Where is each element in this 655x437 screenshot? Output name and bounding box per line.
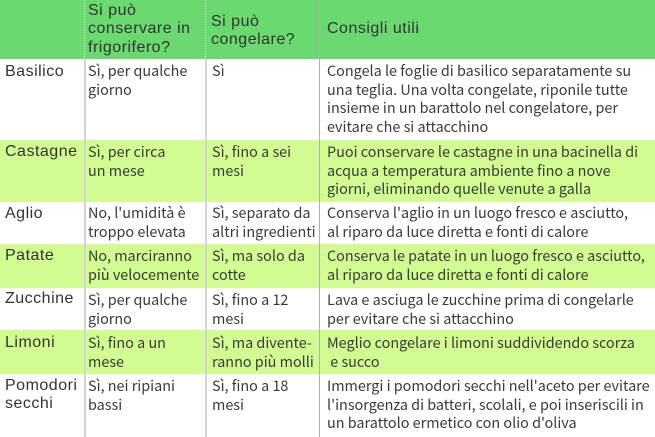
cell: Castagne consigli: Puoi conservare le castagne in una bacinella di acqua a temperatura ambiente fino a nove giorni, eliminando quelle venute a galla <box>327 141 638 199</box>
cell: Basilico congelare: Sì <box>212 60 225 81</box>
row label: Limoni: Limoni <box>5 334 55 351</box>
cell: Zucchine frigorifero: Sì, per qualche giorno <box>88 289 187 329</box>
cell: Limoni frigorifero: Sì, fino a un mese <box>88 332 166 372</box>
row label: Patate: Patate <box>5 247 54 264</box>
header: Si può conservare in frigorifero?: Si può conservare in frigorifero? <box>88 2 191 56</box>
row label: Aglio: Aglio <box>5 205 43 222</box>
header: Consigli utili: Consigli utili <box>327 20 419 37</box>
cell: Limoni consigli: Meglio congelare i limoni suddividendo scorza e succo <box>327 332 635 372</box>
cell: Patate frigorifero: No, marciranno più velocemente <box>88 245 199 285</box>
cell: Zucchine consigli: Lava e asciuga le zucchine prima di congelarle per evitare che si attacchino <box>327 289 634 329</box>
cell: Aglio frigorifero: No, l'umidità è troppo elevata <box>88 202 186 242</box>
row label: Castagne: Castagne <box>5 143 78 160</box>
table header band <box>0 0 655 59</box>
cell: Limoni congelare: Sì, ma divente- ranno più molli <box>212 332 314 372</box>
cell: Patate congelare: Sì, ma solo da cotte <box>212 245 305 285</box>
cell: Castagne frigorifero: Sì, per circa un mese <box>88 141 165 181</box>
cell: Zucchine congelare: Sì, fino a 12 mesi <box>212 289 288 329</box>
cell: Aglio consigli: Conserva l'aglio in un luogo fresco e asciutto, al riparo da luce diretta e fonti di calore <box>327 202 628 242</box>
row label: Pomodori secchi: Pomodori secchi <box>5 377 77 412</box>
header: Si può congelare?: Si può congelare? <box>211 13 295 48</box>
row band: Castagne <box>0 140 655 202</box>
cell: Aglio congelare: Sì, separato da altri ingredienti <box>212 202 316 242</box>
cell: Basilico frigorifero: Sì, per qualche giorno <box>88 60 187 100</box>
row band: Patate <box>0 244 655 288</box>
row label: Zucchine: Zucchine <box>5 290 74 307</box>
row label: Basilico: Basilico <box>5 63 64 80</box>
cell: Castagne congelare: Sì, fino a sei mesi <box>212 141 291 181</box>
row band: Limoni <box>0 330 655 374</box>
cell: Pomodori secchi congelare: Sì, fino a 18 mesi <box>212 375 288 415</box>
cell: Pomodori secchi consigli: Immergi i pomodori secchi nell'aceto per evitare l'insorgenza di batteri, scolali, e poi inseriscili in un barattolo ermetico con olio d'oliva <box>327 375 650 433</box>
cell: Basilico consigli: Congela le foglie di basilico separatamente su una teglia. Una volta congelate, riponile tutte insieme in un barattolo nel congelatore, per evitare che si attacchino <box>327 60 631 137</box>
cell: Pomodori secchi frigorifero: Sì, nei ripiani bassi <box>88 375 175 415</box>
cell: Patate consigli: Conserva le patate in un luogo fresco e asciutto, al riparo da luce diretta e fonti di calore <box>327 245 645 285</box>
